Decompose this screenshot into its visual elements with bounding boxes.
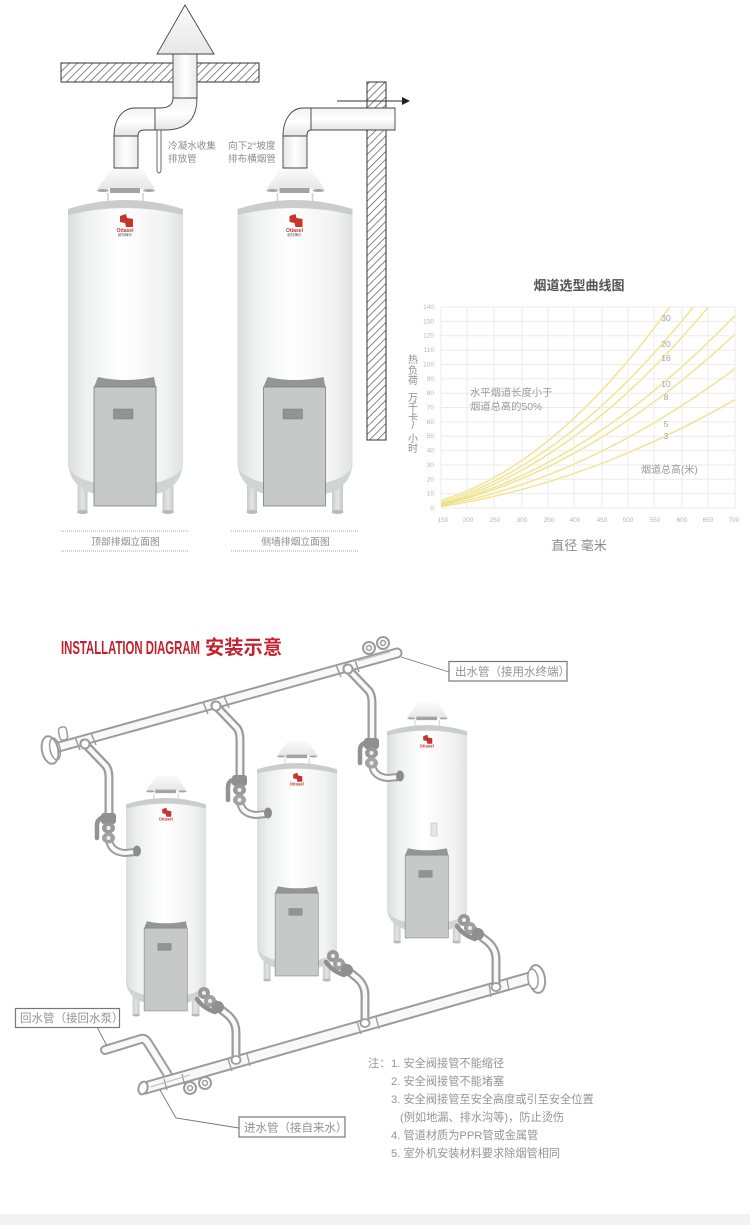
x axis ticks: 650 xyxy=(703,517,714,524)
curve labels: 3 xyxy=(664,431,669,441)
panel: elevation diagrams xyxy=(61,5,410,551)
y axis ticks: 110 xyxy=(424,347,434,354)
y axis title: / xyxy=(412,421,415,432)
water heater B: Ottasel xyxy=(290,781,304,786)
callout: inlet pipe: 进水管（接自来水） xyxy=(244,1120,348,1134)
y axis ticks: 10 xyxy=(427,491,434,498)
water heater B xyxy=(257,741,337,982)
x axis ticks: 150 xyxy=(438,517,449,524)
chart grid xyxy=(441,307,735,508)
x axis ticks: 250 xyxy=(490,517,501,524)
curve labels: 20 xyxy=(661,339,671,349)
label: condensate drain: 冷凝水收集 xyxy=(168,141,216,152)
water heater: top flue xyxy=(68,168,183,514)
water heater: side flue: Ottasel xyxy=(286,228,304,234)
water heater: top flue: Ottasel xyxy=(117,228,134,234)
curve labels: 10 xyxy=(661,379,671,389)
y axis ticks: 20 xyxy=(427,476,434,483)
chart note: 水平烟道长度小于 xyxy=(470,388,552,399)
callout: return pipe xyxy=(16,1008,124,1046)
notes: 3. 安全阀接管至安全高度或引至安全位置 xyxy=(391,1092,594,1106)
x axis ticks: 300 xyxy=(517,517,528,524)
label: condensate drain: 排放管 xyxy=(168,153,197,165)
y axis title: 千 xyxy=(408,402,418,414)
y axis title: 时 xyxy=(408,443,418,455)
x axis ticks: 500 xyxy=(623,517,634,524)
callout: inlet pipe xyxy=(160,1090,348,1137)
y axis ticks xyxy=(423,304,434,512)
caption: side exhaust: 侧墙排烟立面图 xyxy=(261,535,330,548)
x axis title: 直径 毫米 xyxy=(551,538,607,553)
water heater: side flue xyxy=(238,168,352,514)
x axis ticks xyxy=(438,517,740,524)
curve labels: 8 xyxy=(664,392,669,402)
caption: top exhaust xyxy=(61,531,189,551)
water heater C: Ottasel xyxy=(420,743,434,748)
water heater A: Ottasel xyxy=(159,816,173,821)
curve labels: 30 xyxy=(661,313,671,323)
x axis ticks: 550 xyxy=(650,517,661,524)
caption: side exhaust xyxy=(231,531,359,551)
outlet branch B xyxy=(212,702,272,818)
callout: outlet pipe xyxy=(401,657,570,681)
inlet branch C xyxy=(457,914,500,991)
water heater C xyxy=(387,703,467,944)
outlet pipe xyxy=(39,637,397,765)
notes: 2. 安全阀接管不能堵塞 xyxy=(391,1074,504,1088)
curve labels: 5 xyxy=(664,419,669,429)
x axis ticks: 200 xyxy=(463,517,474,524)
gauge on heater C xyxy=(431,823,437,836)
return pipe xyxy=(105,1039,168,1075)
notes: (例如地漏、排水沟等)，防止烫伤 xyxy=(400,1110,564,1124)
chart title: 烟道选型曲线图 xyxy=(533,278,625,293)
flue pipe with roof arrow xyxy=(114,5,214,173)
heading: installation diagram: 安装示意 xyxy=(205,636,282,659)
footer band xyxy=(0,1214,750,1225)
outlet branch C xyxy=(344,664,404,782)
y axis ticks: 90 xyxy=(427,376,434,383)
y axis ticks: 80 xyxy=(427,390,434,397)
y axis ticks: 50 xyxy=(427,433,434,440)
x axis ticks: 400 xyxy=(570,517,581,524)
chart: flue selection curves xyxy=(408,278,740,553)
inlet pipe xyxy=(137,964,547,1095)
legend label: 烟道总高(米) xyxy=(641,463,698,476)
y axis ticks: 100 xyxy=(423,361,434,368)
y axis ticks: 70 xyxy=(427,404,434,412)
curve labels: 16 xyxy=(661,353,671,363)
x axis ticks: 600 xyxy=(677,517,688,524)
y axis ticks: 0 xyxy=(430,505,434,512)
callout: outlet pipe: 出水管（接用水终端） xyxy=(455,664,570,678)
x axis ticks: 700 xyxy=(729,517,740,524)
inlet branch A xyxy=(197,987,240,1064)
arrow: exhaust direction xyxy=(337,97,410,105)
y axis ticks: 120 xyxy=(423,333,434,340)
water heater A xyxy=(126,776,206,1017)
heading: installation diagram: INSTALLATION DIAGRAM xyxy=(61,638,200,658)
y axis title: 小 xyxy=(408,433,418,445)
y axis title: 负 xyxy=(408,364,418,377)
y axis ticks: 130 xyxy=(423,318,434,325)
y axis title: 万 xyxy=(408,393,418,404)
y axis title: 荷 xyxy=(408,375,418,387)
label: slope: 排布横烟管 xyxy=(228,153,276,165)
y axis ticks: 30 xyxy=(427,462,434,469)
y axis ticks: 60 xyxy=(427,419,434,426)
chart note: 烟道总高的50% xyxy=(470,400,542,413)
side wall xyxy=(367,82,386,440)
notes: 5. 室外机安装材料要求除烟管相同 xyxy=(391,1146,560,1160)
ceiling slab xyxy=(61,63,259,82)
x axis ticks: 450 xyxy=(597,517,608,524)
caption: top exhaust: 顶部排烟立面图 xyxy=(91,535,160,548)
water heater: side flue: 欧特梅尔 xyxy=(288,232,302,237)
y axis ticks: 140 xyxy=(423,304,434,311)
callout: return pipe: 回水管（接回水泵） xyxy=(20,1011,124,1025)
x axis ticks: 350 xyxy=(544,517,555,524)
notes: 1. 安全阀接管不能缩径 xyxy=(391,1056,504,1070)
label: slope: 向下2°坡度 xyxy=(228,141,276,152)
notes: 4. 管道材质为PPR管或金属管 xyxy=(391,1128,538,1142)
panel: installation layout xyxy=(16,637,570,1137)
y axis ticks: 40 xyxy=(427,448,434,455)
notes: 注： xyxy=(368,1056,390,1070)
curve labels xyxy=(661,313,671,441)
yellow curves xyxy=(441,307,735,507)
y axis title: 热 xyxy=(408,353,418,366)
notes xyxy=(368,1056,594,1160)
y axis title: 卡 xyxy=(408,411,418,424)
flue pipe through wall xyxy=(283,108,395,168)
y axis title xyxy=(408,353,418,455)
water heater: top flue: 欧特梅尔 xyxy=(118,232,132,237)
outlet branch A xyxy=(80,740,141,856)
inlet branch B xyxy=(326,950,370,1027)
